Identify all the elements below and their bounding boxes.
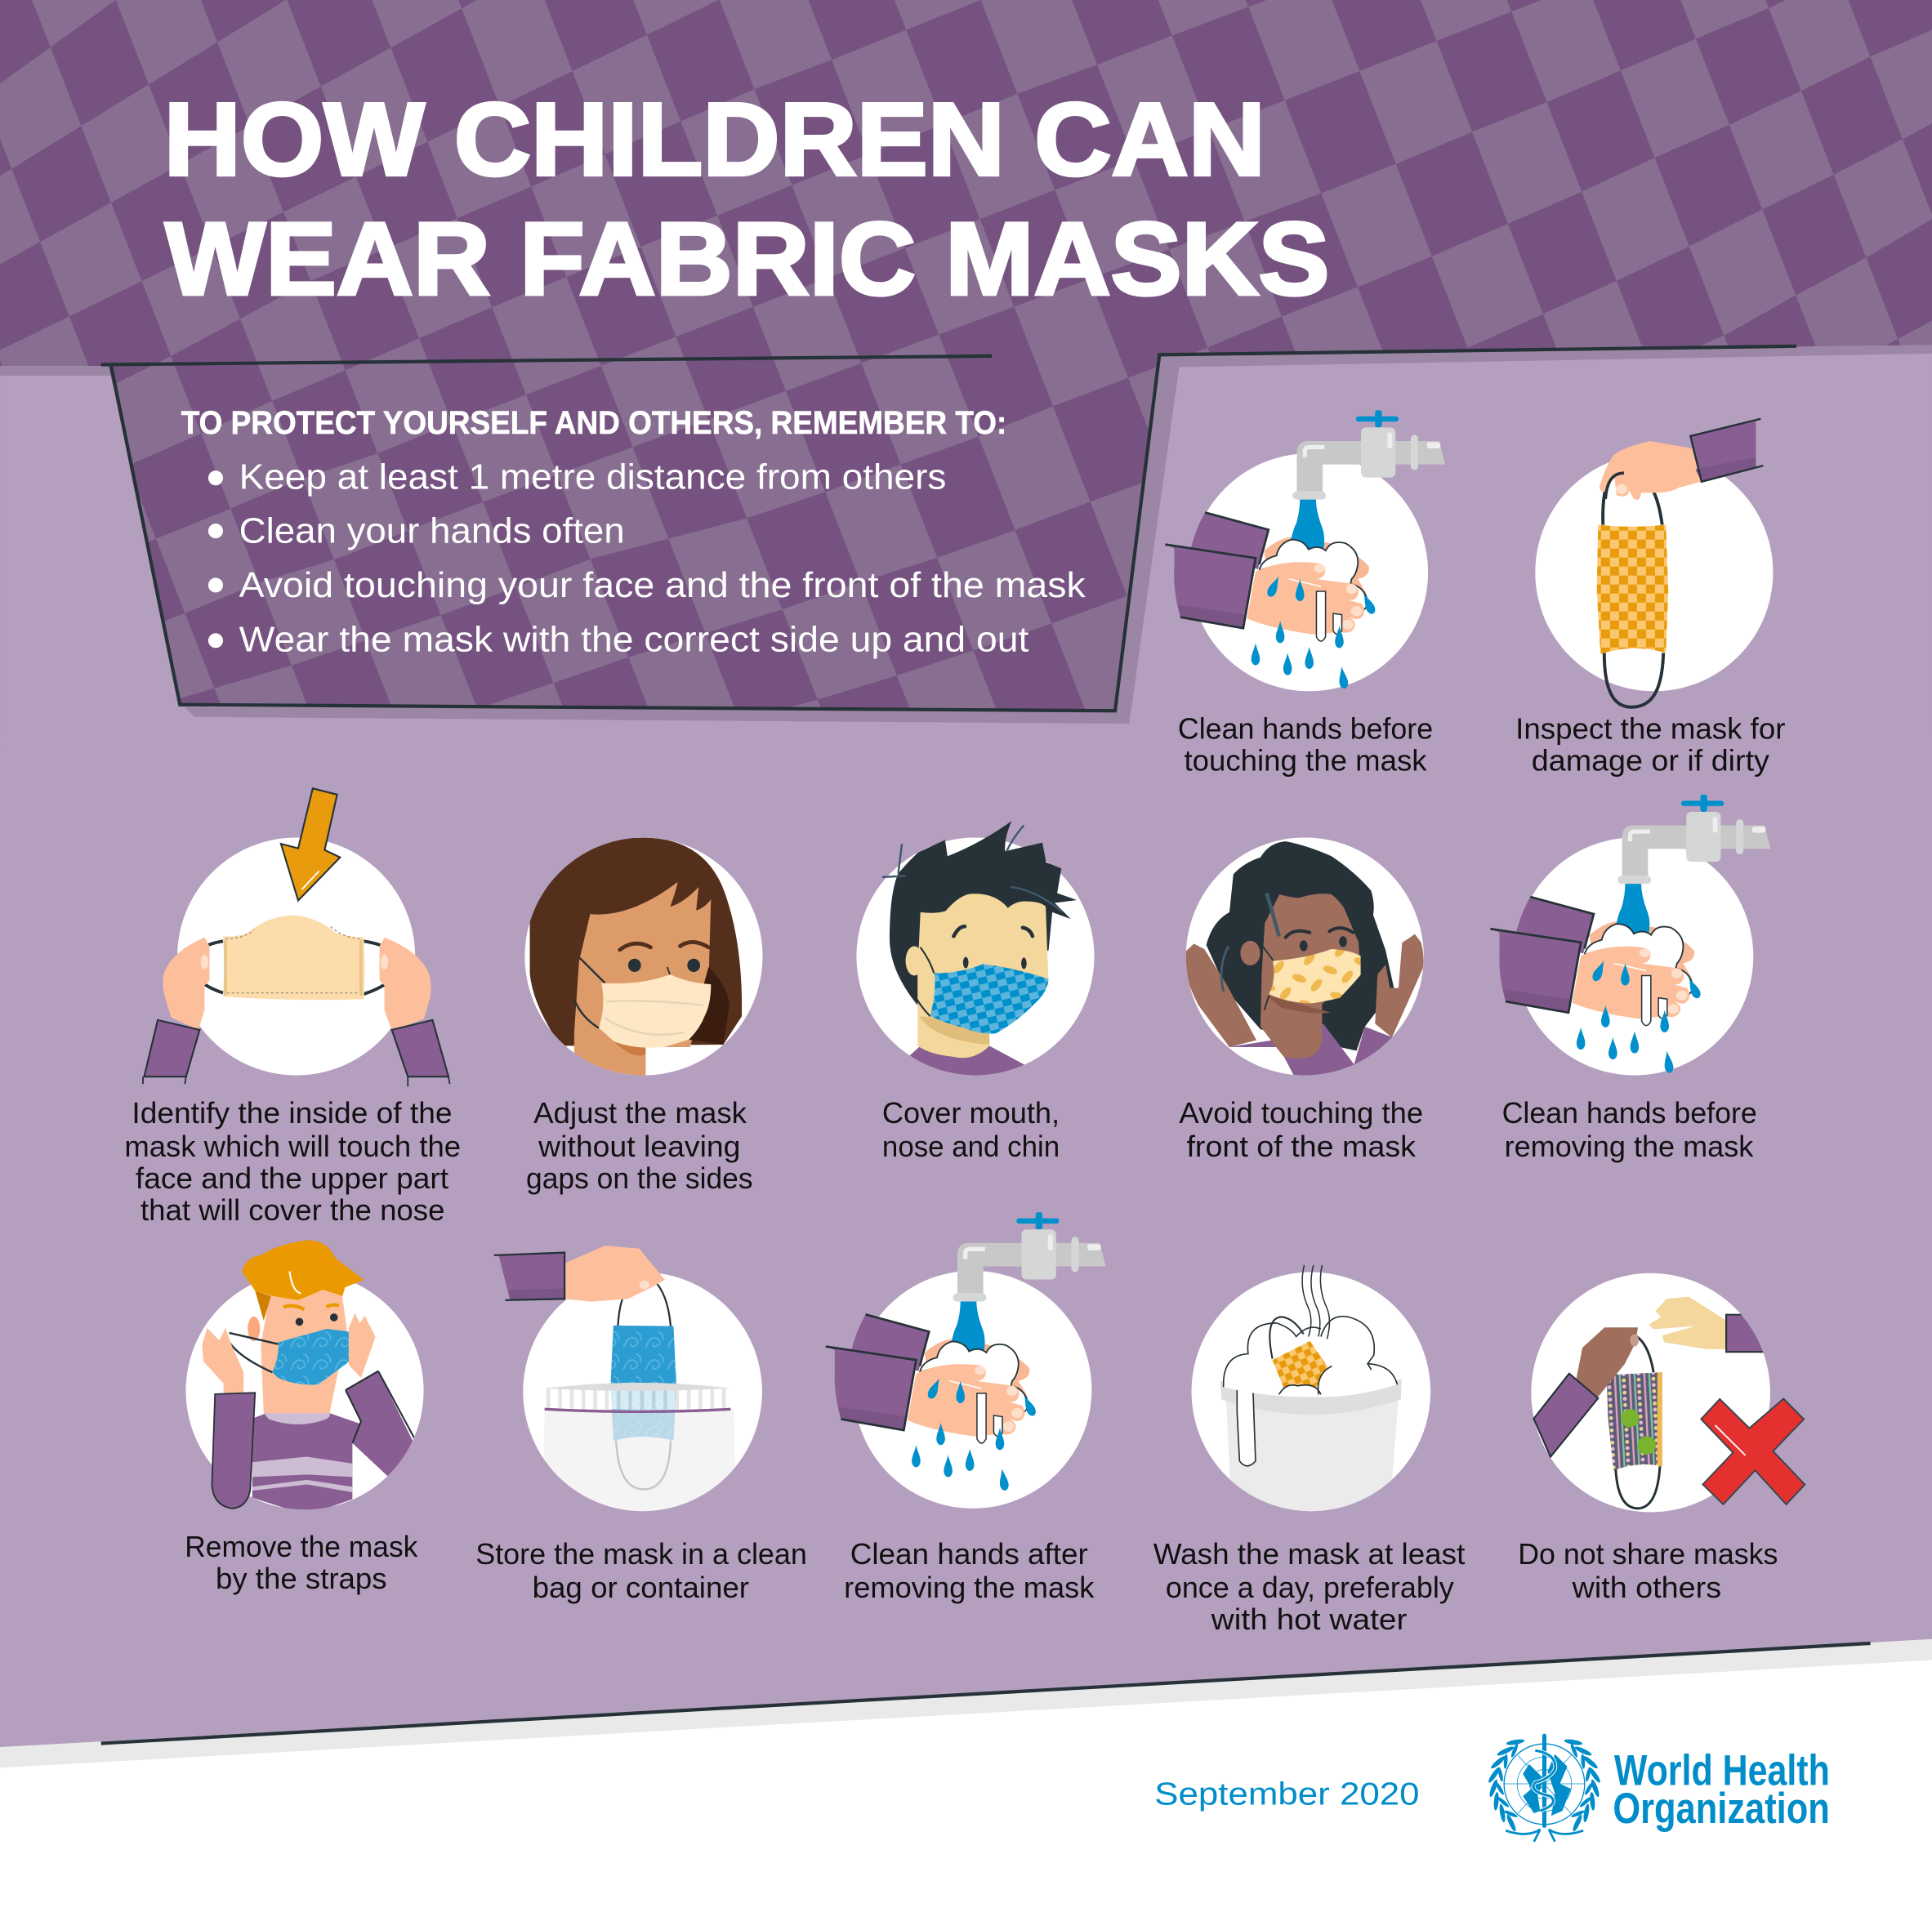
step: avoid touching the front of the mask [1179,837,1424,1163]
caption: nose and chin [882,1130,1060,1163]
caption: Adjust the mask [533,1096,747,1130]
box outline [101,346,1796,711]
emblem [1504,1736,1585,1842]
illustration: girl with brown hair [530,838,742,1084]
box heading: TO PROTECT YOURSELF AND OTHERS, REMEMBER TO: [181,405,1006,441]
bullet list: Keep at least 1 metre distance from others [239,457,946,497]
illustration: tap and washing hands [1165,410,1445,689]
caption: removing the mask [1505,1130,1754,1163]
step: remove the mask by the straps [185,1240,425,1595]
bullet list: Avoid touching your face and the front of the mask [239,565,1086,605]
illustration: tap and washing hands [826,1212,1106,1491]
step: inspect the mask [1515,419,1785,778]
bullet list: Clean your hands often [239,511,625,551]
caption [844,1537,1095,1604]
date: September 2020 [1154,1777,1420,1812]
caption: by the straps [216,1562,387,1595]
caption: face and the upper part [136,1161,448,1195]
illustration: mask lowered into a bag [494,1246,737,1527]
step: clean hands before removing the mask [1490,795,1770,1163]
caption [882,1096,1060,1163]
caption [1178,712,1433,778]
footer rule [101,1643,1871,1743]
icon: red cross [1701,1399,1805,1504]
wordmark: Organization [1613,1785,1830,1833]
caption [1179,1096,1423,1163]
caption: damage or if dirty [1532,744,1770,778]
step: clean hands before touching the mask [1165,410,1445,778]
caption: Clean hands before [1502,1096,1757,1130]
step: adjust the mask [524,837,762,1195]
caption: Inspect the mask for [1515,712,1785,746]
checkered header background [0,0,1932,758]
wordmark [1613,1746,1830,1833]
bullet list: Wear the mask with the correct side up and out [239,619,1028,659]
wreath [1487,1738,1602,1832]
caption: mask which will touch the [124,1130,461,1163]
caption: gaps on the sides [526,1161,753,1195]
caption: with others [1572,1571,1721,1604]
bullet list [208,457,1086,659]
arrow pointing down [281,788,340,901]
caption [1518,1537,1778,1604]
caption [475,1537,807,1604]
illustration: boy with dark hair and blue mask [882,821,1077,1084]
caption: Wash the mask at least [1153,1537,1465,1571]
panel: reminder box [101,346,1796,711]
caption: Remove the mask [185,1530,418,1563]
title: HOW CHILDREN CAN [164,81,1265,197]
step: clean hands after removing the mask [826,1212,1106,1604]
caption: Cover mouth, [882,1096,1060,1130]
title [164,81,1329,316]
caption [124,1096,461,1227]
caption: Avoid touching the [1179,1096,1423,1130]
step: identify the inside of the mask [124,788,461,1227]
caption: without leaving [538,1130,740,1163]
step: cover mouth, nose and chin [856,821,1095,1163]
footer grey band [0,1639,1932,1767]
caption: removing the mask [844,1571,1095,1604]
caption: front of the mask [1186,1130,1417,1163]
main lilac panel [0,345,1932,1747]
caption [1502,1096,1757,1163]
step: do not share masks [1518,1273,1805,1604]
caption: once a day, preferably [1166,1571,1455,1604]
caption [185,1530,418,1595]
caption [1153,1537,1465,1636]
step: store the mask in a clean bag [475,1246,807,1604]
caption [526,1096,753,1195]
caption: bag or container [533,1571,749,1604]
illustration: mask in a bucket of hot water [1220,1265,1402,1527]
illustration: mask passed between two hands [1534,1297,1774,1509]
wordmark: World Health [1614,1746,1830,1794]
caption: with hot water [1211,1602,1407,1636]
illustration: boy with orange hair [202,1240,425,1515]
caption: Do not share masks [1518,1537,1778,1571]
icon: checkered mask held by hand [1597,419,1763,707]
caption [1515,712,1785,778]
title: WEAR FABRIC MASKS [165,200,1329,316]
icon: mask held by two hands [143,916,450,1086]
caption: Store the mask in a clean [475,1537,807,1571]
illustration: girl with long dark hair and hands raised [1183,841,1423,1076]
caption: Clean hands before [1178,712,1433,746]
logo: World Health Organization [1487,1736,1830,1842]
step: wash the mask [1153,1265,1465,1636]
caption: that will cover the nose [141,1193,445,1227]
caption: touching the mask [1184,744,1427,778]
caption: Identify the inside of the [132,1096,453,1130]
illustration: tap and washing hands [1490,795,1770,1073]
caption: Clean hands after [850,1537,1088,1571]
panel drop shadows [0,345,1932,724]
